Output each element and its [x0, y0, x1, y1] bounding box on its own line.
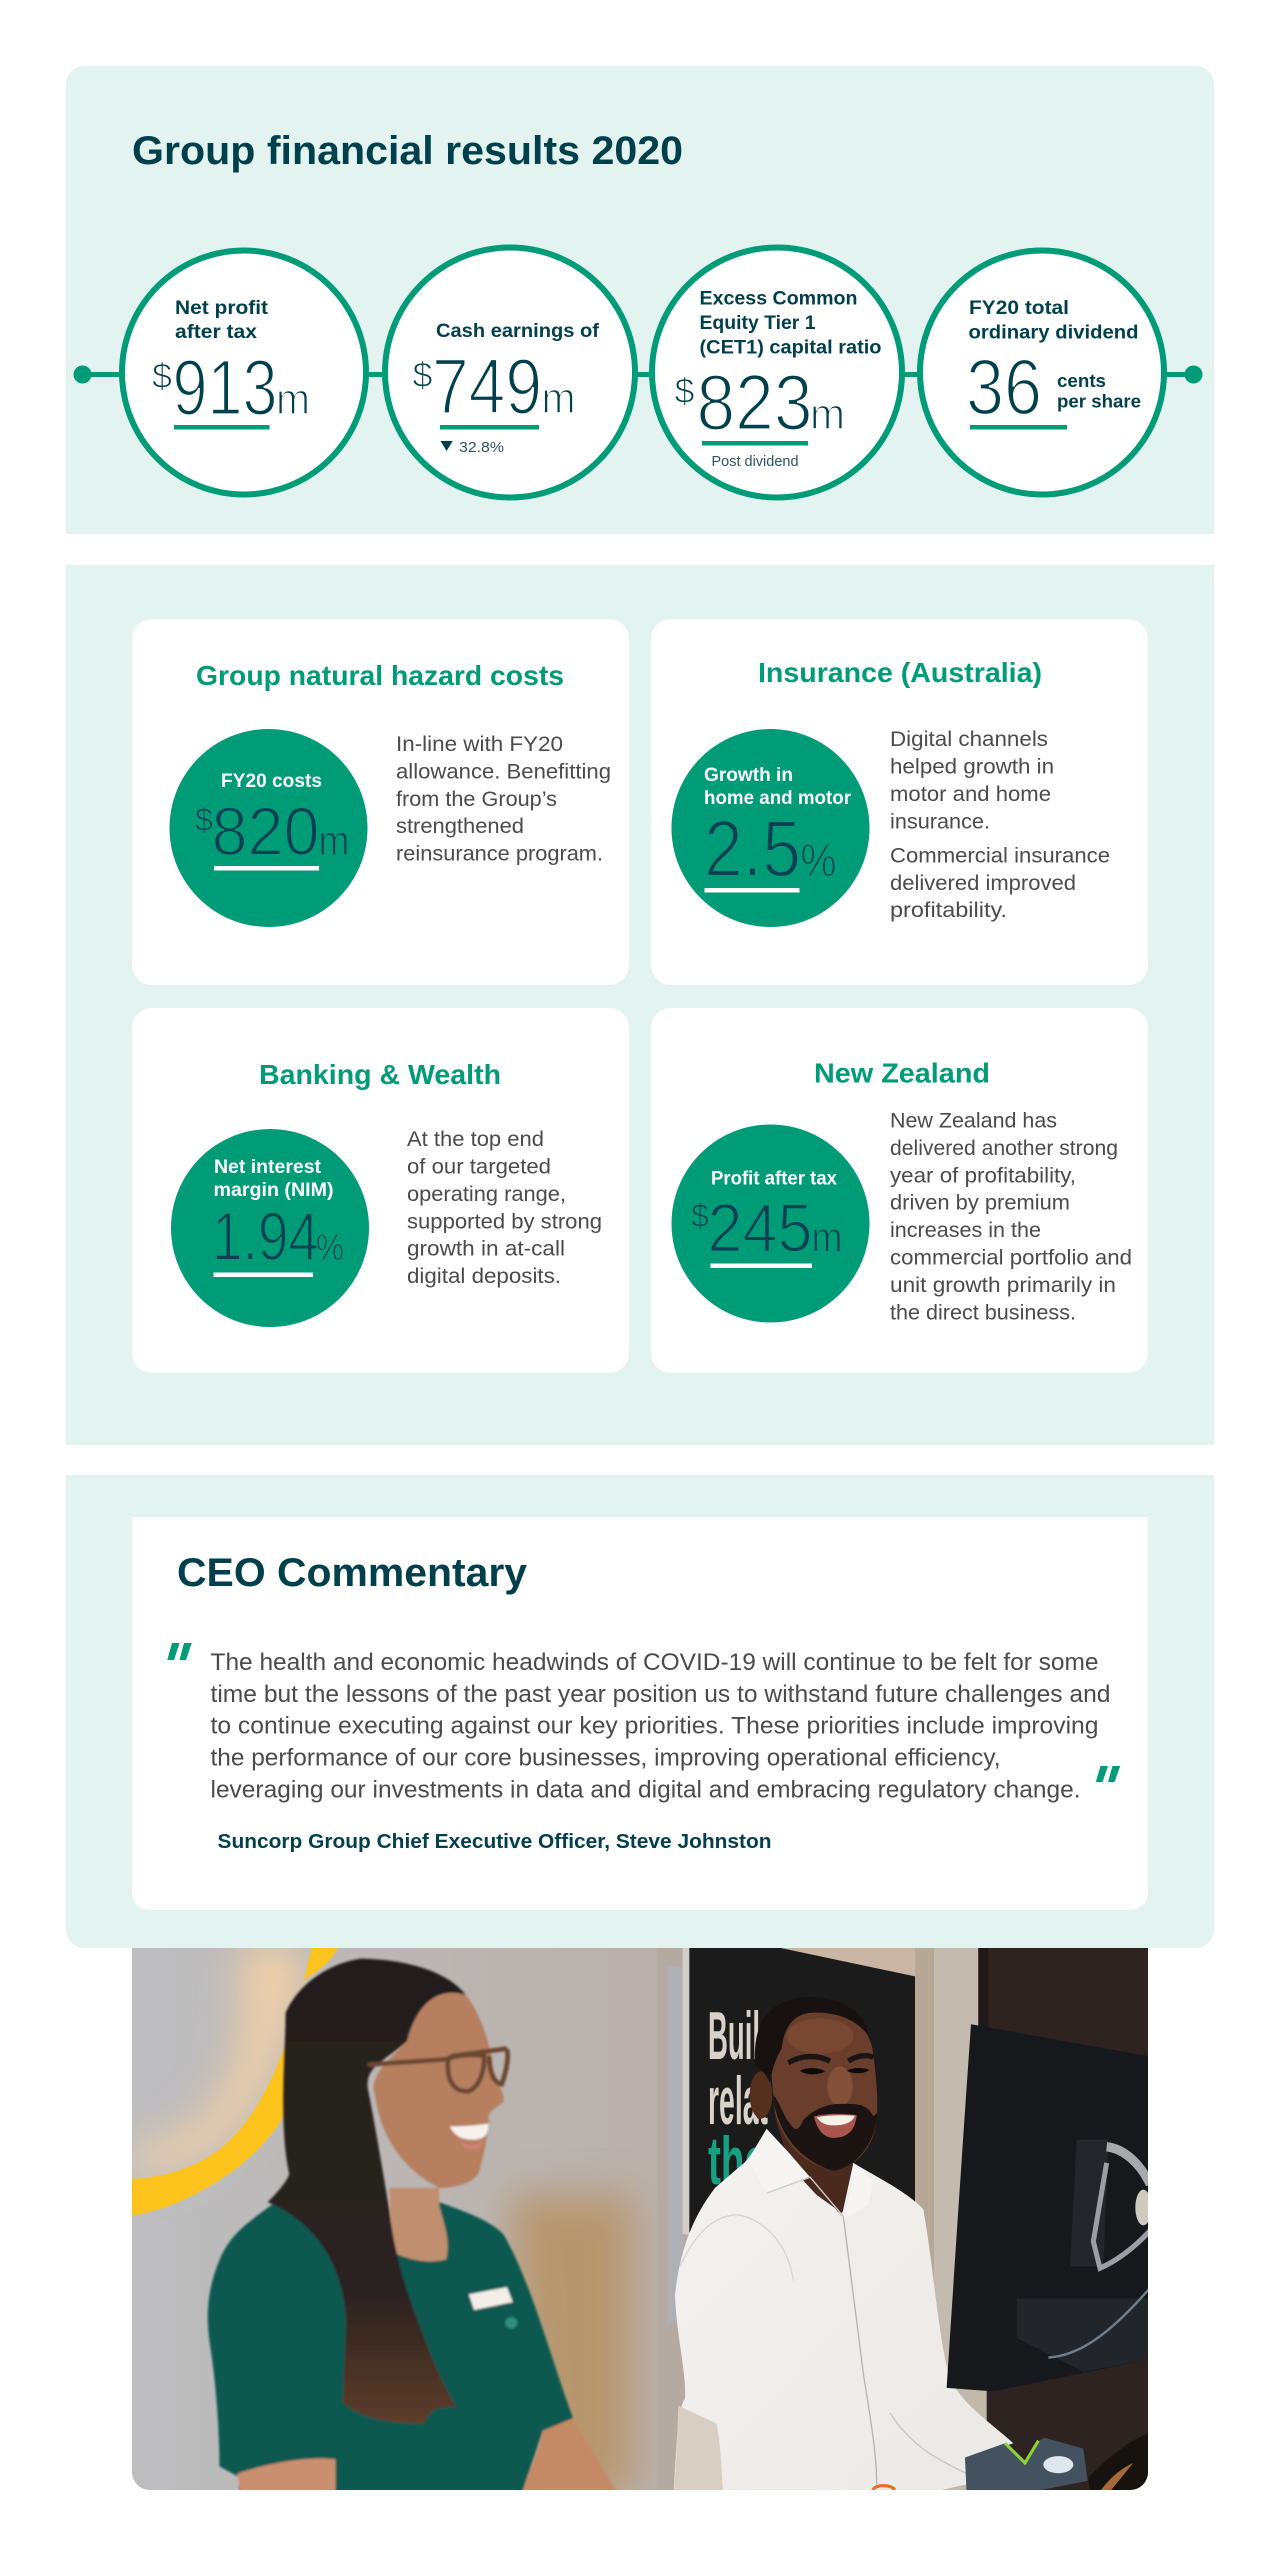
commentary card — [132, 1517, 1148, 1910]
card: group natural hazard costs: FY20 costs — [221, 771, 322, 792]
card: group natural hazard costs: Group natural hazard costs — [196, 660, 564, 691]
metric circle: net profit after tax: after tax — [175, 322, 257, 343]
metric circle: CET1 capital ratio: 823 — [696, 358, 812, 446]
panel: group financial results — [66, 66, 1214, 534]
card: banking and wealth: margin (NIM) — [214, 1180, 334, 1201]
card: insurance Australia: 2.5 — [704, 804, 801, 893]
metric circle: cash earnings — [385, 248, 635, 498]
card: insurance Australia: Insurance (Australia) — [758, 657, 1042, 688]
card: New Zealand: commercial portfolio and — [890, 1246, 1132, 1270]
card: group natural hazard costs: 820 — [212, 793, 320, 870]
card: group natural hazard costs: m — [318, 817, 350, 864]
card: banking and wealth: operating range, — [407, 1183, 566, 1206]
metric circle: FY20 total ordinary dividend: FY20 total — [969, 298, 1069, 319]
card: group natural hazard costs: reinsurance program. — [396, 842, 603, 866]
quote text: time but the lessons of the past year position us to withstand future challenges and — [210, 1681, 1110, 1708]
metric circle: CET1 capital ratio: m — [810, 390, 845, 439]
desk monitor — [947, 2024, 1150, 2391]
poster text — [708, 2010, 768, 2184]
card: New Zealand: year of profitability, — [890, 1164, 1076, 1188]
metric circle: net profit after tax — [122, 250, 366, 494]
title: Group financial results 2020 — [132, 129, 683, 173]
metric circle: cash earnings: Cash earnings of — [436, 321, 600, 342]
photo: two staff members at a service desk: Buil — [708, 1998, 760, 2074]
card: insurance Australia: helped growth in — [890, 756, 1054, 778]
photo left: woman against grey wall with yellow ring — [132, 1945, 703, 2516]
card: group natural hazard costs: $ — [195, 801, 213, 838]
card reader device — [965, 2438, 1088, 2495]
card: New Zealand: driven by premium — [890, 1192, 1070, 1214]
card: group natural hazard costs — [132, 619, 629, 985]
photo: two staff members at a service desk: relat — [708, 2063, 768, 2139]
card: banking and wealth: growth in at-call — [407, 1238, 565, 1260]
photo: two staff members at a service desk — [132, 1945, 1152, 2516]
card: banking and wealth: supported by strong — [407, 1210, 602, 1234]
card: New Zealand: New Zealand has — [890, 1110, 1057, 1132]
photo right: man in white shirt, poster and monitor — [657, 1945, 1152, 2516]
man's shirt — [673, 2129, 1013, 2495]
card: New Zealand: delivered another strong — [890, 1137, 1118, 1160]
card: New Zealand — [651, 1008, 1148, 1373]
card: banking and wealth — [132, 1008, 629, 1373]
quote text: The health and economic headwinds of COVID-19 will continue to be felt for some — [210, 1649, 1098, 1676]
card: insurance Australia: profitability. — [890, 899, 1007, 922]
card: insurance Australia: Growth in — [704, 765, 793, 786]
metric circle: net profit after tax: $ — [152, 357, 172, 396]
metric circle: cash earnings: $ — [412, 356, 432, 395]
icon: opening quote mark — [167, 1643, 192, 1660]
poster text: the — [708, 2123, 766, 2199]
metric circle: cash earnings: m — [542, 374, 576, 423]
quote text: leveraging our investments in data and digital and embracing regulatory change. — [210, 1776, 1080, 1804]
metric circle: FY20 total ordinary dividend — [920, 250, 1164, 494]
metric circle: FY20 total ordinary dividend: cents — [1057, 371, 1106, 391]
card: New Zealand: $ — [691, 1197, 709, 1234]
card: insurance Australia: % — [800, 834, 836, 886]
timeline connector with end dots — [74, 366, 1202, 384]
card: New Zealand: m — [812, 1214, 842, 1260]
metric circle: FY20 total ordinary dividend: 36 — [966, 342, 1042, 431]
card: insurance Australia: motor and home — [890, 783, 1051, 806]
metric circle: CET1 capital ratio: $ — [674, 372, 694, 411]
panel: CEO commentary — [66, 1475, 1214, 1948]
quote text — [210, 1649, 1110, 1804]
metric circle: cash earnings: 749 — [432, 342, 542, 430]
quote text: the performance of our core businesses, improving operational efficiency, — [210, 1744, 1000, 1772]
card: group natural hazard costs: strengthened — [396, 815, 524, 838]
card: insurance Australia: delivered improved — [890, 872, 1076, 895]
metric circle: cash earnings: 32.8% — [459, 439, 504, 456]
card: New Zealand: the direct business. — [890, 1302, 1076, 1324]
card: New Zealand: Profit after tax — [711, 1168, 837, 1190]
card: banking and wealth: % — [316, 1227, 344, 1268]
metric circle: net profit after tax: 913 — [172, 342, 278, 432]
card: insurance Australia: home and motor — [704, 788, 852, 809]
card: banking and wealth: Banking & Wealth — [259, 1059, 501, 1090]
card: banking and wealth: Net interest — [214, 1157, 322, 1178]
card: insurance Australia — [651, 619, 1148, 985]
card: New Zealand: unit growth primarily in — [890, 1274, 1116, 1297]
card: insurance Australia: insurance. — [890, 810, 990, 834]
metric circle: CET1 capital ratio: (CET1) capital ratio — [700, 338, 882, 358]
card: group natural hazard costs: from the Group’s — [396, 788, 557, 811]
panel: business segments — [66, 565, 1214, 1445]
card: banking and wealth: 1.94 — [212, 1198, 319, 1275]
card: New Zealand: increases in the — [890, 1219, 1041, 1242]
card: banking and wealth: digital deposits. — [407, 1265, 561, 1288]
card: group natural hazard costs: In-line with FY20 — [396, 733, 563, 756]
card: banking and wealth: At the top end — [407, 1128, 544, 1151]
metric circle: CET1 capital ratio: Excess Common — [700, 288, 858, 310]
card: insurance Australia: Digital channels — [890, 728, 1048, 751]
metric circle: CET1 capital ratio: Post dividend — [712, 453, 798, 470]
heading: CEO Commentary: CEO Commentary — [177, 1551, 528, 1595]
metric circle: CET1 capital ratio: Equity Tier 1 — [700, 313, 816, 334]
metric circle: net profit after tax: Net profit — [175, 298, 269, 319]
quote text: to continue executing against our key priorities. These priorities include improving — [210, 1712, 1098, 1740]
card: New Zealand: 245 — [708, 1190, 812, 1266]
metric circle: CET1 capital ratio — [652, 248, 902, 498]
attribution: Suncorp Group Chief Executive Officer, Steve Johnston — [218, 1831, 772, 1853]
metric circle: FY20 total ordinary dividend: ordinary dividend — [968, 322, 1138, 344]
card: banking and wealth: of our targeted — [407, 1156, 551, 1178]
card: New Zealand: New Zealand — [814, 1058, 990, 1088]
metric circle: FY20 total ordinary dividend: per share — [1057, 392, 1141, 412]
icon: closing quote mark — [1096, 1766, 1120, 1782]
card: group natural hazard costs: allowance. Benefitting — [396, 760, 611, 784]
man's head — [750, 2071, 772, 2119]
metric circle: net profit after tax: m — [276, 375, 310, 424]
card: insurance Australia: Commercial insurance — [890, 844, 1110, 868]
